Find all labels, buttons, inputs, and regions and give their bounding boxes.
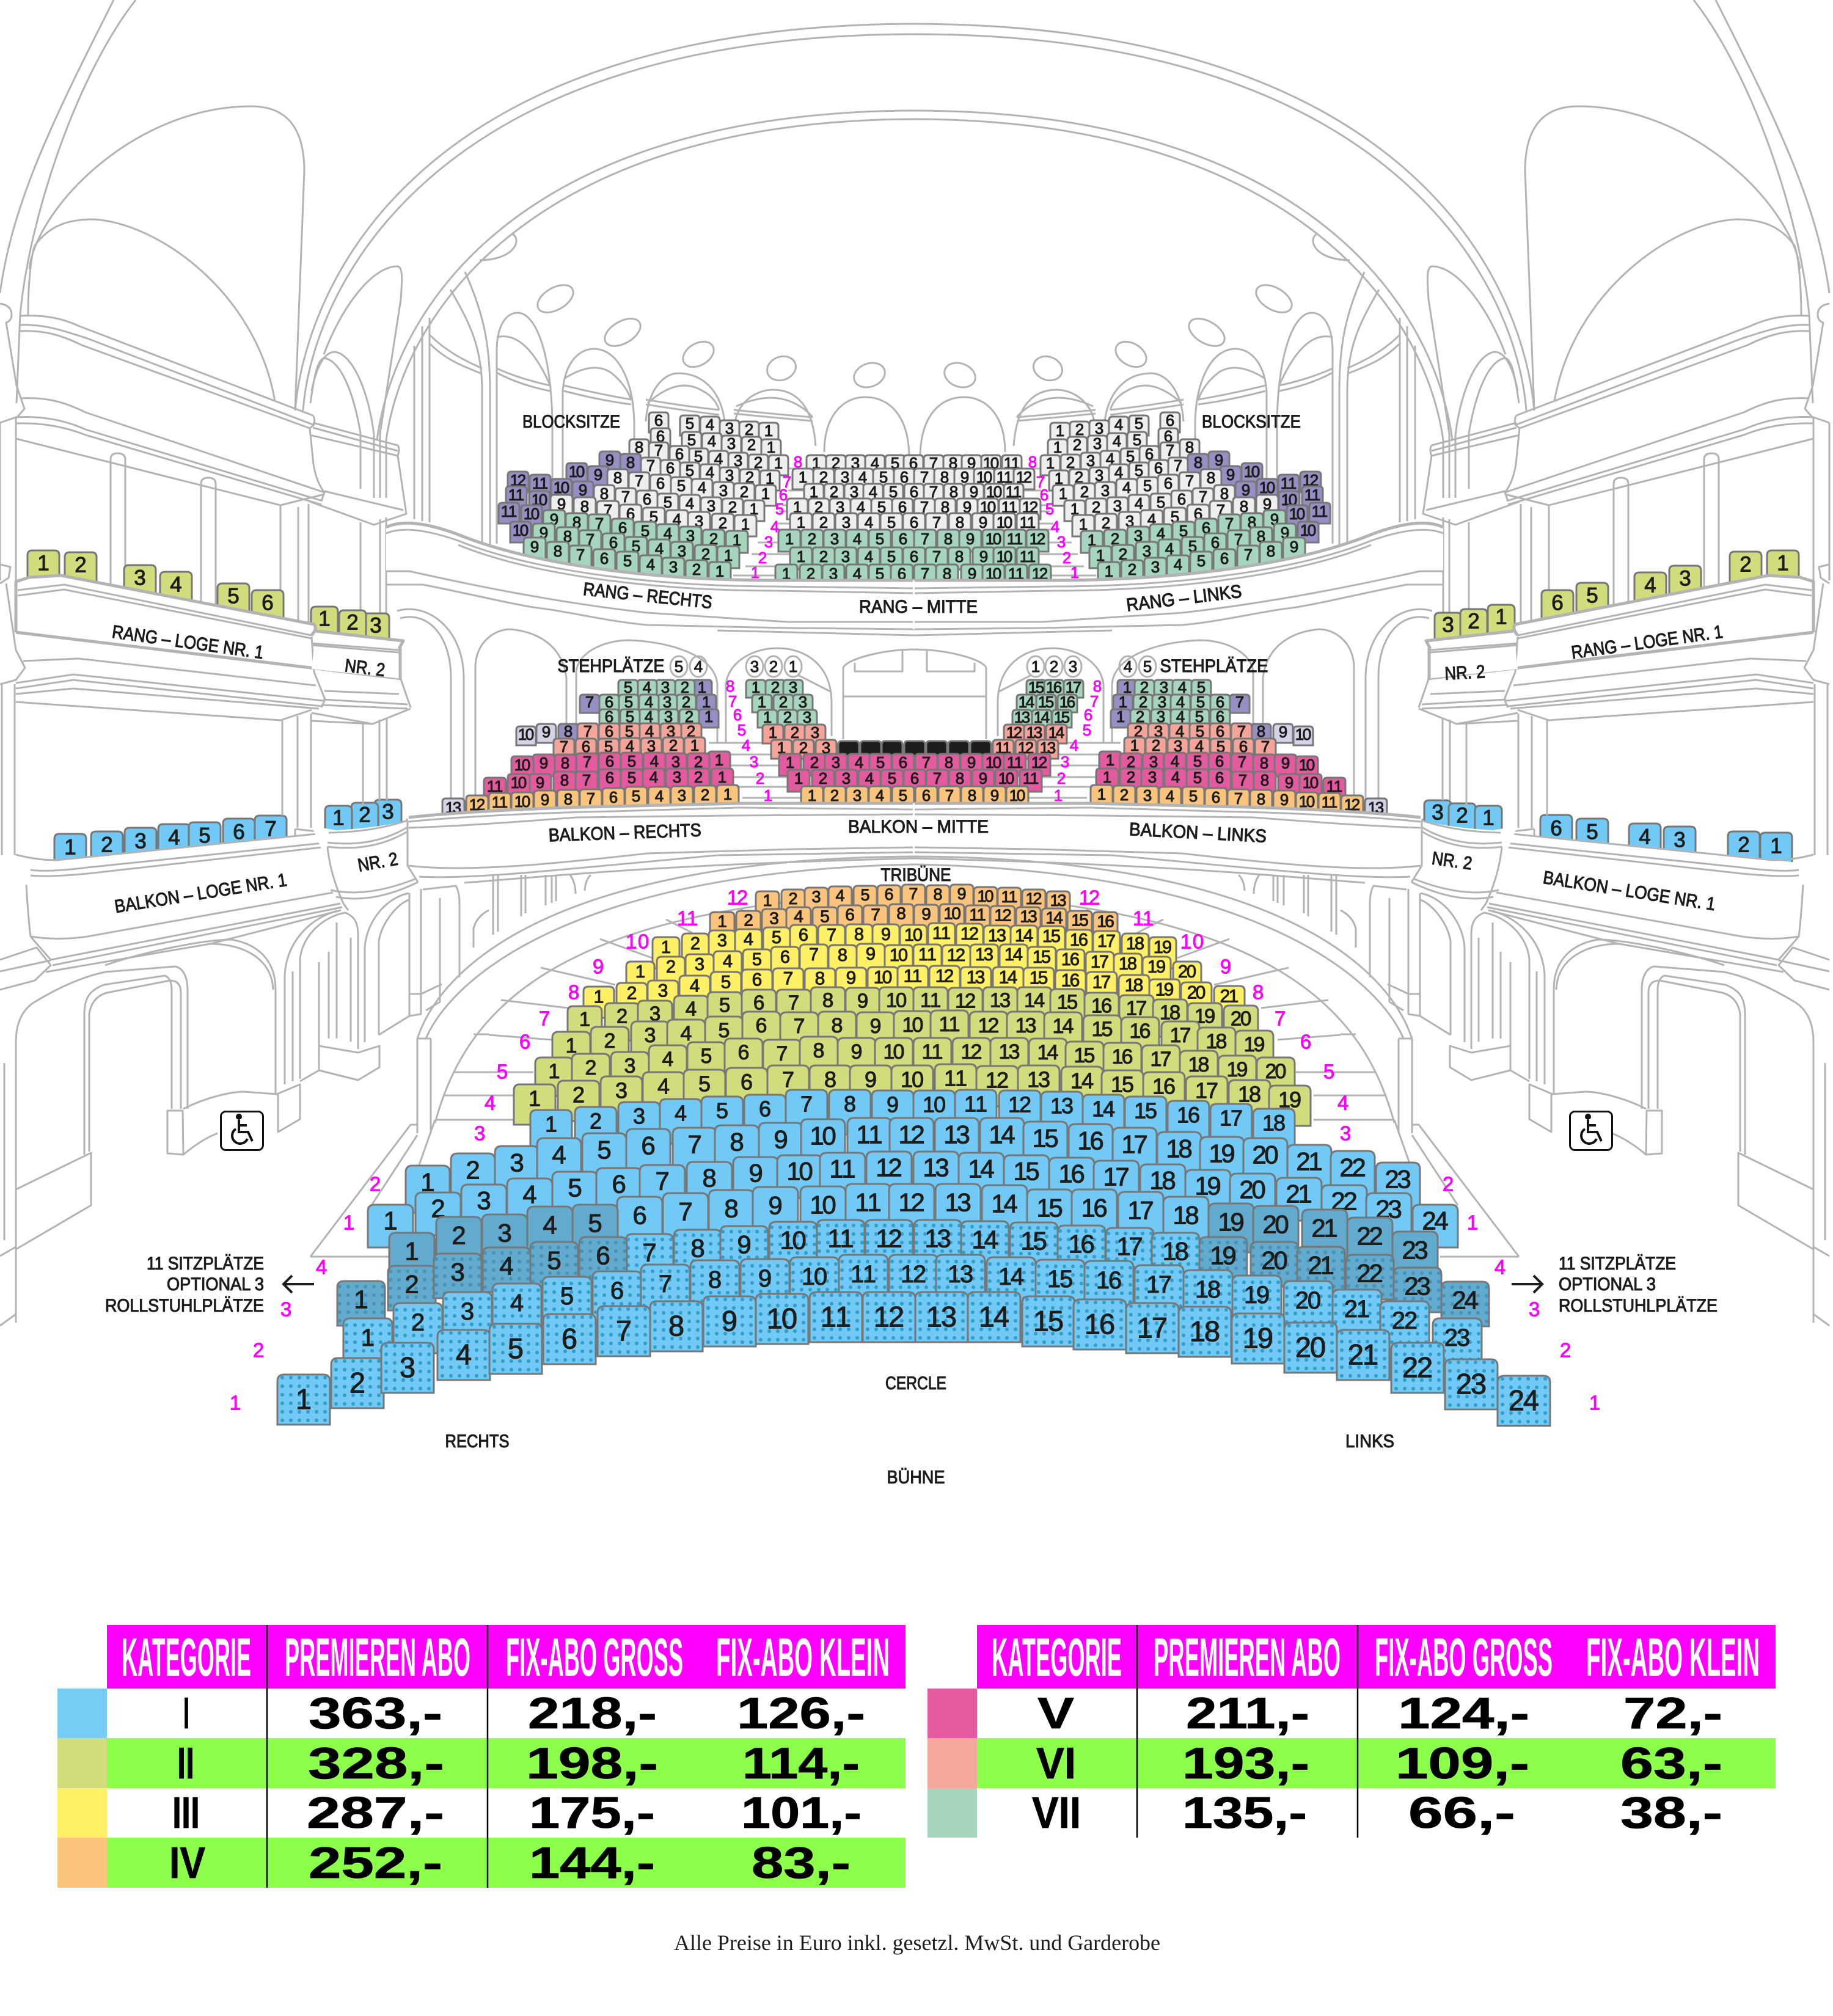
rang rechts row d: 123456789 <box>606 451 774 488</box>
row 5: 1234567891011121314151617181920 <box>549 1039 1286 1083</box>
balkon rechts row 5: 2345678910 <box>518 722 695 743</box>
table header: KATEGORIE <box>992 1627 1122 1687</box>
table values: 109,- <box>1396 1739 1529 1788</box>
balkon mitte row 3: 123456789101112 <box>786 753 1047 772</box>
rang rechts row i: 12345678910 <box>513 521 733 564</box>
label: links: LINKS <box>1345 1431 1394 1452</box>
seating: balkon links <box>1097 678 1384 817</box>
rang links row c: 12345678 <box>1046 438 1194 472</box>
table header: PREMIEREN ABO <box>285 1627 470 1687</box>
table values: 363,- <box>309 1689 442 1738</box>
magenta row numbers: cercle and tribune: 101112 <box>626 886 748 953</box>
note: wheelchair places left: ROLLSTUHLPLÄTZE <box>105 1296 264 1316</box>
table values: 252,- <box>309 1839 442 1888</box>
label: blocksitze left: BLOCKSITZE <box>522 412 620 432</box>
table values: 218,- <box>528 1689 657 1738</box>
row band IV <box>107 1838 906 1888</box>
label: stehplaetze left: STEHPLÄTZE <box>557 656 665 676</box>
rang links row f: 123456789101112 <box>1070 471 1319 518</box>
magenta row numbers: cercle and tribune <box>230 886 1600 1414</box>
note: wheelchair places left <box>105 1254 264 1316</box>
seating: cercle and tribune <box>296 885 1539 1416</box>
table values: 193,- <box>1182 1739 1309 1788</box>
seating: balkon mitte <box>752 678 1081 805</box>
label: cercle: CERCLE <box>885 1373 946 1393</box>
table values: 66,- <box>1408 1789 1515 1838</box>
rang links row j: 123456789 <box>1105 538 1298 580</box>
balkon links row 5: 2345678910 <box>1134 722 1311 743</box>
label: balkon loge nr 1 left: BALKON – LOGE NR. 1 <box>1542 867 1717 915</box>
swatch: category IV <box>57 1838 107 1888</box>
label: tribuene: TRIBÜNE <box>881 865 951 885</box>
arrow: left <box>284 1276 314 1293</box>
row band VI <box>977 1738 1776 1788</box>
balkon mitte row 6: 123131415 <box>763 708 1070 726</box>
seating: side boxes <box>37 551 1789 859</box>
row 10: 12345678910111213141516171819 <box>661 924 1172 957</box>
price table: categories V to VII <box>927 1625 1776 1838</box>
rang links row b: 123456 <box>1053 427 1173 456</box>
label: stehplaetze right: STEHPLÄTZE <box>1160 656 1268 676</box>
cercle row 2 dotted: 1234567891011121314151617181920212223 <box>361 1261 1470 1351</box>
rang rechts row j: 123456789 <box>530 538 724 580</box>
row 7: 1234567891011121314151617181920 <box>579 988 1251 1030</box>
balkon links row 7: 1234567 <box>1119 693 1244 711</box>
header background <box>107 1625 906 1689</box>
rang mitte row 2: 1234567891011 <box>797 547 1036 566</box>
note: wheelchair places right: 11 SITZPLÄTZE <box>1559 1254 1676 1274</box>
icon: wheelchair left <box>221 1112 263 1150</box>
label: blocksitze right: BLOCKSITZE <box>1202 412 1301 432</box>
rang mitte row 6: 1234567891011 <box>810 483 1022 501</box>
row 3 blue: 123456789101112131415161718 <box>545 1091 1286 1136</box>
table values: I <box>183 1689 189 1738</box>
table values: 101,- <box>741 1789 862 1838</box>
row 11 tribune: 12345678910111213141516 <box>717 904 1114 931</box>
table header <box>122 1627 890 1687</box>
table values: 211,- <box>1186 1689 1309 1738</box>
rang rechts row f: 123456789101112 <box>510 471 758 518</box>
swatch: category VI <box>927 1738 977 1788</box>
row 4: 12345678910111213141516171819 <box>529 1065 1301 1112</box>
note: wheelchair places left: OPTIONAL 3 <box>167 1274 264 1295</box>
table values: IV <box>169 1839 205 1888</box>
balkon rechts row 7: 1234567 <box>585 693 711 711</box>
balkon rechts row 2: 1234567891011 <box>487 768 726 795</box>
balkon rechts row 4: 1234567 <box>560 736 699 756</box>
rang loge nr 1 links: 123456 <box>1551 551 1789 615</box>
balkon loge nr 1 rechts: 1234567 <box>64 817 277 859</box>
table values: VII <box>1032 1789 1081 1838</box>
table values: VI <box>1036 1739 1076 1788</box>
balkon loge nr 1 links: 123456 <box>1550 816 1782 858</box>
table values: 124,- <box>1398 1689 1529 1738</box>
magenta row numbers: cercle and tribune: 1234123456789 <box>230 955 604 1414</box>
seating: rang rechts <box>501 411 783 580</box>
background: theatre architecture line art <box>0 0 1829 1326</box>
balkon mitte row 7: 123141516 <box>758 693 1075 711</box>
footnote: Alle Preise in Euro inkl. gesetzl. MwSt. und Garderobe <box>674 1930 1160 1955</box>
balkon mitte row 5: 123121314 <box>769 723 1064 742</box>
row 1 blue: 123456789101112131415161718192021222324 <box>383 1153 1449 1235</box>
table values: 198,- <box>526 1739 658 1788</box>
rang links row i: 12345678910 <box>1096 521 1316 564</box>
label: rang nr 2 right: NR. 2 <box>343 656 386 681</box>
balkon rechts row 6: 123456 <box>605 707 713 726</box>
section labels <box>111 412 1724 1488</box>
table values: 63,- <box>1620 1739 1722 1788</box>
balkon links row 4: 1234567 <box>1130 736 1270 756</box>
balkon links row 1: 12345678910111213 <box>1097 785 1384 817</box>
cercle row 4 with darker seats: 1234567891011121314151617181920212223 <box>404 1188 1429 1266</box>
row band II <box>107 1738 906 1788</box>
row 2 blue: 1234567891011121314151617181920212223 <box>420 1120 1411 1196</box>
table header: PREMIEREN ABO <box>1154 1627 1341 1687</box>
row 12 tribune: 12345678910111213 <box>763 885 1067 910</box>
balkon links row 2: 1234567891011 <box>1103 768 1342 795</box>
label: balkon mitte: BALKON – MITTE <box>848 817 989 837</box>
balkon rechts row 1: 12345678910111213 <box>445 785 732 817</box>
table values: 38,- <box>1620 1789 1722 1838</box>
magenta row numbers: cercle and tribune: 1234123456789 <box>1220 955 1600 1414</box>
row 9: 1234567891011121314151617181920 <box>635 944 1196 982</box>
magenta row numbers: rang: 87654321 <box>751 453 802 582</box>
balkon links row 6: 123456 <box>1116 707 1224 726</box>
rang mitte row 5: 123456789101112 <box>793 498 1038 516</box>
balkon loge nr 2 links: 123 <box>1432 800 1495 830</box>
balkon mitte row 8: 123151617 <box>752 678 1081 696</box>
icon: wheelchair right <box>1570 1112 1612 1150</box>
seating: rang links <box>1046 411 1328 580</box>
price table: categories I to IV <box>57 1625 906 1888</box>
rang rechts row a: 123456 <box>654 411 773 440</box>
rang rechts row g: 1234567891011 <box>508 486 750 533</box>
rang links row d: 123456789 <box>1055 451 1223 488</box>
header background <box>977 1625 1776 1689</box>
magenta row numbers: rang: 87654321 <box>1054 677 1102 805</box>
rang mitte row 4: 1234567891011 <box>797 513 1036 531</box>
table values: V <box>1037 1689 1074 1738</box>
balkon rechts row 8: 12345 <box>624 678 706 696</box>
rang links row h: 1234567891011 <box>1088 502 1328 549</box>
table values <box>1032 1689 1722 1838</box>
table values: 144,- <box>529 1839 655 1888</box>
table values <box>169 1689 865 1888</box>
magenta row numbers: rang: 87654321 <box>726 677 772 805</box>
label: balkon nr 2 left: NR. 2 <box>1430 849 1473 874</box>
table values: 126,- <box>737 1689 865 1738</box>
cercle row 3 dotted with darker seats: 123456789101112131415161718192021222324 <box>354 1224 1479 1315</box>
table values: 135,- <box>1182 1789 1307 1838</box>
table values: III <box>172 1789 200 1838</box>
balkon mitte row 2: 1234567891011 <box>794 769 1039 787</box>
table values: 72,- <box>1623 1689 1722 1738</box>
row 6: 12345678910111213141516171819 <box>566 1013 1265 1057</box>
rang loge nr 1 rechts: 123456 <box>37 551 274 615</box>
swatch: category II <box>57 1738 107 1788</box>
note: wheelchair places right: OPTIONAL 3 <box>1559 1274 1656 1295</box>
swatch: category I <box>57 1689 107 1738</box>
balcony fronts: rang, balkon and box parapets <box>0 523 1829 972</box>
label: buehne: BÜHNE <box>887 1467 945 1488</box>
rang rechts row e: 12345678910 <box>569 462 770 503</box>
rang rechts row h: 1234567891011 <box>501 502 741 549</box>
row 8: 123456789101112131415161718192021 <box>594 966 1238 1007</box>
rang rechts row c: 12345678 <box>635 438 783 472</box>
label: balkon loge nr 1 right: BALKON – LOGE NR. 1 <box>113 870 288 917</box>
table header: FIX-ABO GROSS <box>506 1627 683 1687</box>
rang mitte row 3: 123456789101112 <box>785 530 1045 548</box>
swatch: category III <box>57 1788 107 1838</box>
note: wheelchair places right <box>1559 1254 1718 1316</box>
rang mitte row 7: 123456789101112 <box>799 468 1032 486</box>
balkon links row 3: 12345678910 <box>1106 751 1315 774</box>
table values: 175,- <box>529 1789 655 1838</box>
label: rechts: RECHTS <box>445 1431 510 1452</box>
label: rang mitte: RANG – MITTE <box>859 597 978 617</box>
note: wheelchair places right: ROLLSTUHLPLÄTZE <box>1559 1296 1718 1316</box>
magenta row numbers: rang <box>726 453 1102 805</box>
swatch: category V <box>927 1689 977 1738</box>
label: rang loge nr 1 left: RANG – LOGE NR. 1 <box>1570 622 1724 663</box>
table values: II <box>177 1739 194 1788</box>
table values: 83,- <box>752 1839 851 1888</box>
table header <box>992 1627 1760 1687</box>
label: rang nr 2 left: NR. 2 <box>1444 662 1485 684</box>
rang mitte row 8: 1234567891011 <box>812 454 1020 472</box>
table values: 114,- <box>742 1739 860 1788</box>
balkon links row 8: 12345 <box>1123 678 1206 696</box>
standing-room circles: 5432112345 <box>675 657 1152 676</box>
label: rang links: RANG – LINKS <box>1125 582 1243 616</box>
balkon mitte row 4 with blocked seats: 123111213 <box>777 739 1056 757</box>
label: balkon rechts: BALKON – RECHTS <box>548 820 701 845</box>
table header: KATEGORIE <box>122 1627 251 1687</box>
label: balkon links: BALKON – LINKS <box>1129 819 1267 847</box>
arrow: right <box>1512 1276 1542 1293</box>
rang loge nr 2 links: 123 <box>1442 605 1507 637</box>
text: FIX-ABO KLEIN <box>716 1627 890 1687</box>
table values: 287,- <box>307 1789 444 1838</box>
swatch: category VII <box>927 1788 977 1838</box>
cercle row 1 dotted: 123456789101112131415161718192021222324 <box>296 1300 1539 1416</box>
label: balkon nr 2 right: NR. 2 <box>356 849 400 876</box>
rang mitte row 1: 123456789101112 <box>782 564 1048 583</box>
balkon mitte row 1: 12345678910 <box>808 786 1025 805</box>
table header: FIX-ABO GROSS <box>1375 1627 1553 1687</box>
seating: balkon rechts <box>445 678 732 817</box>
balkon loge nr 2 rechts: 123 <box>332 800 394 830</box>
balkon rechts row 3: 12345678910 <box>514 751 723 774</box>
rang links row a: 123456 <box>1056 411 1174 440</box>
magenta row numbers: rang: 87654321 <box>1028 453 1079 582</box>
label: rang rechts: RANG – RECHTS <box>582 579 713 613</box>
seating: rang mitte <box>782 454 1048 583</box>
note: wheelchair places left: 11 SITZPLÄTZE <box>147 1254 264 1274</box>
rang links row e: 12345678910 <box>1059 462 1260 503</box>
rang loge nr 2 rechts: 123 <box>318 607 382 638</box>
magenta row numbers: cercle and tribune: 101112 <box>1079 886 1204 953</box>
table values: 328,- <box>308 1739 444 1788</box>
rang links row g: 1234567891011 <box>1079 486 1320 533</box>
label: rang loge nr 1 right: RANG – LOGE NR. 1 <box>111 622 265 663</box>
rang rechts row b: 123456 <box>656 427 775 456</box>
